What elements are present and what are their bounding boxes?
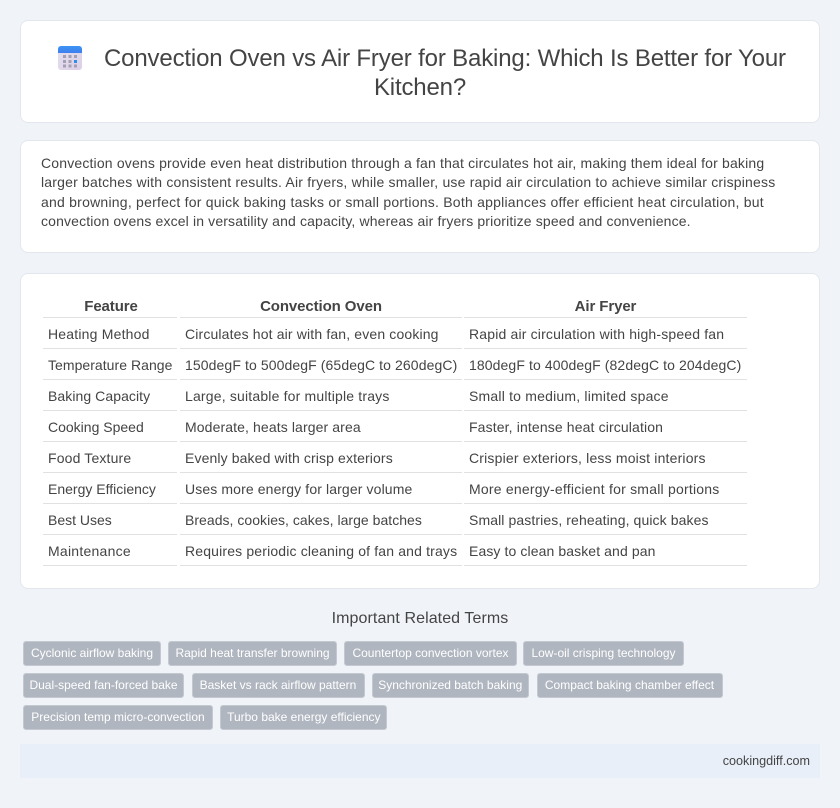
related terms tags: Precision temp micro-convection — [31, 710, 205, 724]
comparison table: Small to medium, limited space — [469, 388, 669, 404]
comparison table: 150degF to 500degF (65degC to 260degC) — [185, 357, 457, 373]
intro text: larger batches with consistent results. Air fryers, while smaller, use rapid air circulation to achieve similar crispiness — [41, 174, 775, 190]
related terms tags — [23, 641, 723, 730]
comparison table: Food Texture — [48, 450, 131, 466]
header panel — [20, 20, 820, 123]
title: Kitchen? — [374, 74, 466, 101]
related terms tags: Compact baking chamber effect — [545, 678, 714, 692]
intro text — [41, 155, 775, 229]
comparison table: Energy Efficiency — [48, 481, 156, 497]
title: Convection Oven vs Air Fryer for Baking: Which Is Better for Your — [104, 45, 786, 72]
intro panel — [20, 140, 820, 253]
related terms tags: Cyclonic airflow baking — [31, 646, 153, 660]
related terms tags: Turbo bake energy efficiency — [227, 710, 380, 724]
comparison table: Uses more energy for larger volume — [185, 481, 412, 497]
comparison table: Convection Oven — [260, 298, 382, 315]
comparison table: Heating Method — [48, 326, 150, 342]
comparison table: Cooking Speed — [48, 419, 144, 435]
comparison table: Feature — [84, 298, 138, 315]
footer bar — [20, 744, 820, 778]
comparison table: Maintenance — [48, 543, 131, 559]
comparison table — [43, 298, 747, 566]
title — [104, 45, 786, 101]
related terms tags: Dual-speed fan-forced bake — [29, 678, 178, 692]
related terms tags: Countertop convection vortex — [352, 646, 509, 660]
related terms tags: Rapid heat transfer browning — [175, 646, 330, 660]
comparison table: Moderate, heats larger area — [185, 419, 361, 435]
comparison table: Crispier exteriors, less moist interiors — [469, 450, 706, 466]
comparison table: Breads, cookies, cakes, large batches — [185, 512, 422, 528]
comparison table: Circulates hot air with fan, even cooking — [185, 326, 439, 342]
comparison table: Evenly baked with crisp exteriors — [185, 450, 393, 466]
related terms tags: Basket vs rack airflow pattern — [200, 678, 356, 692]
comparison table: Faster, intense heat circulation — [469, 419, 663, 435]
intro text: convection ovens excel in versatility and capacity, whereas air fryers prioritize speed and convenience. — [41, 213, 691, 229]
comparison table: Air Fryer — [575, 298, 636, 315]
comparison table: Requires periodic cleaning of fan and trays — [185, 543, 457, 559]
intro text: Convection ovens provide even heat distribution through a fan that circulates hot air, making them ideal for baking — [41, 155, 764, 171]
footer source: cookingdiff.com — [723, 754, 810, 768]
icon: calendar grid — [58, 46, 82, 70]
related terms heading: Important Related Terms — [332, 610, 508, 627]
comparison table: Best Uses — [48, 512, 112, 528]
comparison table: Small pastries, reheating, quick bakes — [469, 512, 709, 528]
related terms tags: Synchronized batch baking — [378, 678, 522, 692]
comparison table: More energy-efficient for small portions — [469, 481, 720, 497]
comparison table: Easy to clean basket and pan — [469, 543, 655, 559]
comparison table: Large, suitable for multiple trays — [185, 388, 390, 404]
comparison table: Baking Capacity — [48, 388, 150, 404]
related terms tags: Low-oil crisping technology — [531, 646, 676, 660]
intro text: and browning, perfect for quick baking tasks or small portions. Both appliances offer efficient heat circulation, but — [41, 194, 764, 210]
comparison table: 180degF to 400degF (82degC to 204degC) — [469, 357, 741, 373]
comparison table panel — [20, 273, 820, 589]
comparison table: Temperature Range — [48, 357, 172, 373]
comparison table: Rapid air circulation with high-speed fan — [469, 326, 724, 342]
